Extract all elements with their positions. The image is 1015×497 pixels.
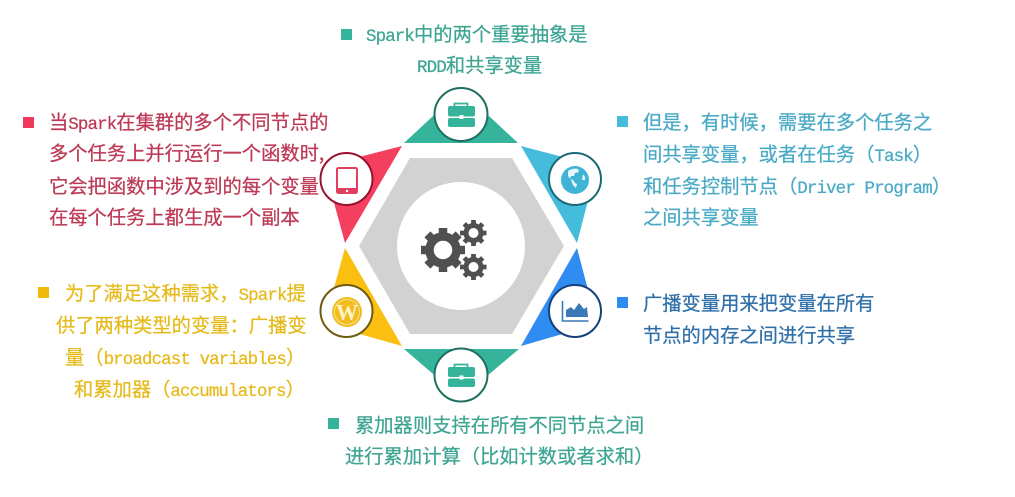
icon: area chart: [562, 301, 588, 321]
text block: top teal: RDD和共享变量: [417, 50, 542, 78]
icon: briefcase top: [448, 104, 475, 127]
segment: lower left yellow: [320, 248, 402, 346]
text block: upper left red: 在每个任务上都生成一个副本: [49, 202, 300, 230]
segment: lower right blue: [521, 248, 601, 346]
text block: upper left red: 多个任务上并行运行一个函数时,: [49, 138, 324, 166]
text block: upper right cyan: 和任务控制节点（Driver Program）: [643, 171, 951, 199]
text block: lower left yellow: 量（broadcast variables）: [65, 342, 305, 370]
segment: bottom teal: [404, 348, 519, 402]
segment: top teal: [404, 88, 518, 143]
text block: upper right cyan: 但是，有时候，需要在多个任务之: [643, 107, 932, 135]
text block: bottom teal: 进行累加计算（比如计数或者求和）: [345, 441, 654, 469]
text block: lower right blue: 广播变量用来把变量在所有: [643, 288, 874, 316]
icon: globe: [561, 166, 589, 194]
segment: upper left red: [320, 146, 402, 243]
text block: upper left red: 它会把函数中涉及到的每个变量: [49, 171, 319, 199]
text block: bottom teal: 累加器则支持在所有不同节点之间: [355, 410, 644, 438]
icon: tablet: [336, 167, 358, 194]
text block: lower right blue: 节点的内存之间进行共享: [643, 320, 855, 348]
text block: upper right cyan: 之间共享变量: [643, 202, 759, 230]
icon: wordpress: W: [336, 300, 358, 324]
segment: upper right cyan: [521, 146, 601, 243]
text block: lower left yellow: 为了满足这种需求，Spark提: [65, 278, 306, 306]
text block: lower left yellow: 供了两种类型的变量：广播变: [56, 310, 307, 338]
icon: gears: [421, 220, 486, 280]
icon: briefcase bottom: [448, 364, 475, 387]
text block: lower left yellow: 和累加器（accumulators）: [74, 374, 305, 402]
text block: upper left red: 当Spark在集群的多个不同节点的: [49, 107, 328, 135]
gray hexagon with white centre: [359, 158, 564, 334]
text block: upper right cyan: 间共享变量，或者在任务（Task）: [643, 139, 932, 167]
text block: top teal: Spark中的两个重要抽象是: [366, 19, 588, 47]
